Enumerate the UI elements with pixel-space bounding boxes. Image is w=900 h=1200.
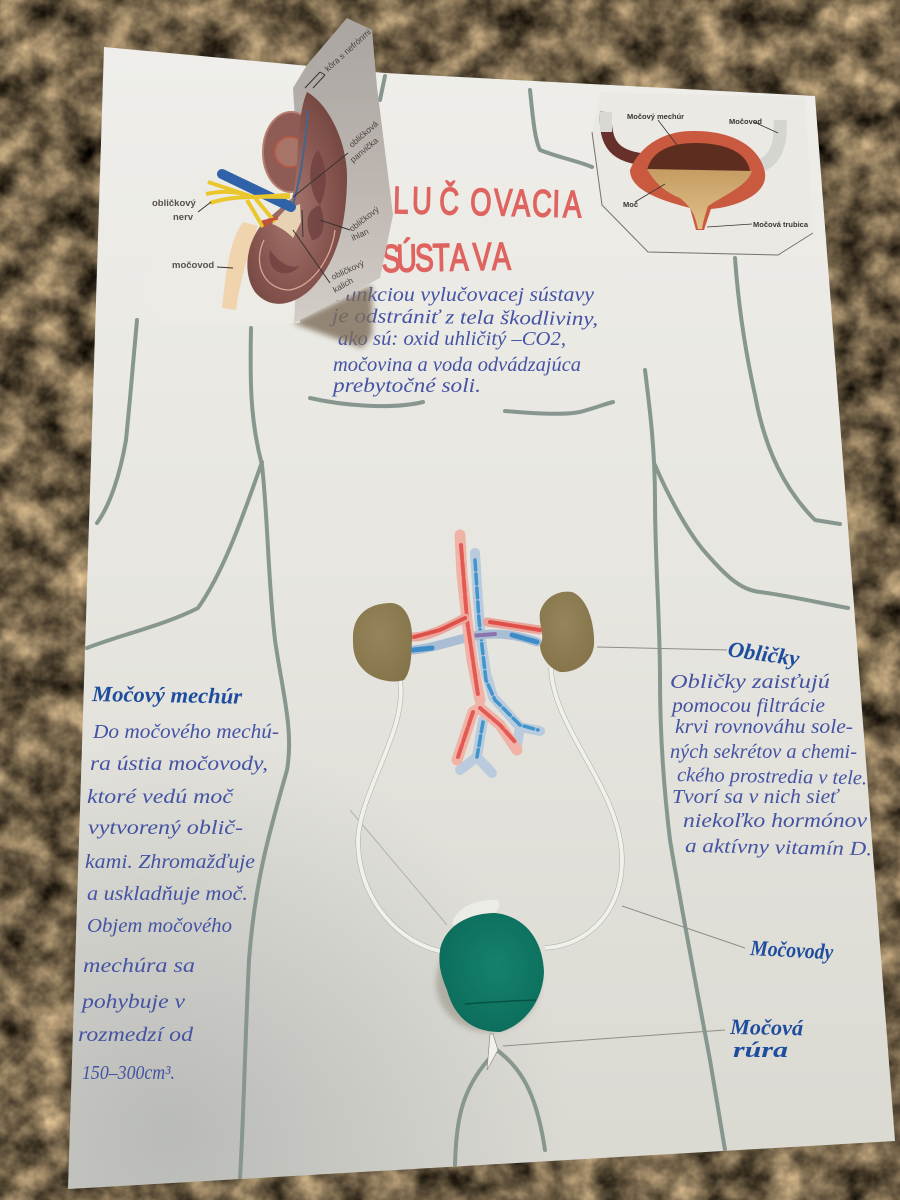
intro text block: Funkciou vylučovacej sústavy (331, 284, 594, 306)
right ureter (752, 120, 780, 168)
bladder text block: kami. Zhromažďuje (85, 851, 255, 873)
bladder text block: Objem močového (87, 915, 232, 937)
left kidney model (353, 603, 412, 682)
kidneys text block: ných sekrétov a chemi- (670, 741, 857, 763)
bladder text block: vytvorený oblič- (88, 817, 243, 839)
label: urethra (729, 1014, 804, 1062)
kidneys text block: pomocou filtrácie (670, 695, 825, 717)
kidney pyramids (269, 150, 326, 273)
label: urethra: Močová (729, 1014, 804, 1040)
aorta (457, 535, 517, 760)
ureter (222, 222, 258, 310)
kidneys text block (670, 671, 872, 860)
left ureter (606, 112, 648, 160)
blood vessels model (413, 535, 540, 773)
vena cava (460, 553, 540, 773)
kidneys text block: Tvorí sa v nich sieť (672, 786, 840, 808)
lower kidney body (247, 92, 347, 304)
kidney labels: obličkový (152, 198, 197, 209)
kidneys text block: ckého prostredia v tele. (677, 764, 867, 789)
title line 2: SÚSTAVA (381, 235, 512, 281)
leader lines (198, 72, 350, 283)
body outline drawing (87, 76, 848, 1178)
yellow nerves (206, 182, 290, 227)
label: urethra: rúra (733, 1037, 788, 1062)
bladder labels: Močový mechúr (627, 112, 684, 121)
leader lines (350, 647, 745, 1046)
bladder picture card: Moč (623, 200, 638, 209)
card paper (137, 120, 300, 323)
intro text block: je odstrániť z tela škodliviny, (328, 305, 598, 330)
kidney picture card: močovod (172, 260, 214, 271)
red arteries (262, 218, 278, 226)
intro text block (328, 284, 598, 397)
intro text block: ako sú: oxid uhličitý –CO2, (338, 328, 566, 350)
kidney picture card: ihlan (350, 226, 370, 243)
kidney picture card: panvička (348, 135, 380, 165)
bladder text block: mechúra sa (83, 955, 195, 977)
bladder picture card: Močovod (729, 117, 762, 126)
bladder text block: ra ústia močovody, (90, 753, 268, 775)
kidneys text block: Obličky zaisťujú (670, 671, 830, 693)
bladder text block: rozmedzí od (78, 1024, 194, 1046)
kidney picture card (137, 18, 393, 323)
right kidney model (540, 592, 594, 672)
bladder text block (78, 721, 279, 1084)
intro text block: močovina a voda odvádzajúca (333, 354, 581, 376)
white top of bladder (452, 900, 499, 925)
blue vein (222, 174, 291, 207)
shadow under kidney flap (293, 285, 372, 348)
kidneys text block: a aktívny vitamín D. (685, 835, 872, 860)
bladder picture card (592, 92, 813, 255)
title line 1: VYLUČOVACIA (343, 177, 583, 226)
label: ureters: Močovody (749, 935, 834, 964)
intro text block: prebytočné soli. (331, 375, 481, 397)
card paper (592, 92, 813, 255)
bladder model (436, 900, 544, 1070)
bladder picture card: Močová trubica (753, 220, 809, 229)
title (343, 177, 583, 281)
kidney picture card: obličkový (330, 258, 366, 282)
bladder text block: pohybuje v (80, 991, 185, 1013)
renal pelvis (272, 204, 301, 238)
urine (647, 169, 752, 229)
renal artery (413, 618, 540, 637)
kidneys text block: krvi rovnováhu sole- (675, 716, 853, 738)
kidney picture card: obličková (347, 119, 380, 150)
ureters model (358, 668, 622, 952)
bladder text block: a uskladňuje moč. (87, 883, 248, 905)
kidneys text block: niekoľko hormónov (683, 810, 867, 832)
label: bladder heading: Močový mechúr (91, 681, 243, 709)
label: kidneys heading: Obličky (726, 636, 801, 671)
kidney picture card: kôra s nefrónmi (323, 27, 373, 73)
shadow (436, 932, 540, 1032)
kidney picture card: obličkový (347, 204, 381, 234)
bladder text block: Do močového mechú- (92, 721, 279, 743)
bladder text block: 150–300cm³. (82, 1062, 175, 1084)
upper kidney lobe (263, 112, 319, 192)
bladder wall (630, 131, 765, 230)
bladder air cavity (647, 143, 750, 171)
urethra (487, 1034, 498, 1070)
kidney picture card: nerv (173, 212, 194, 223)
folded flap (293, 18, 393, 323)
green clay (439, 913, 544, 1032)
bladder text block: ktoré vedú moč (87, 786, 234, 808)
renal vein (413, 634, 537, 650)
kidney picture card: kalich (331, 275, 355, 295)
